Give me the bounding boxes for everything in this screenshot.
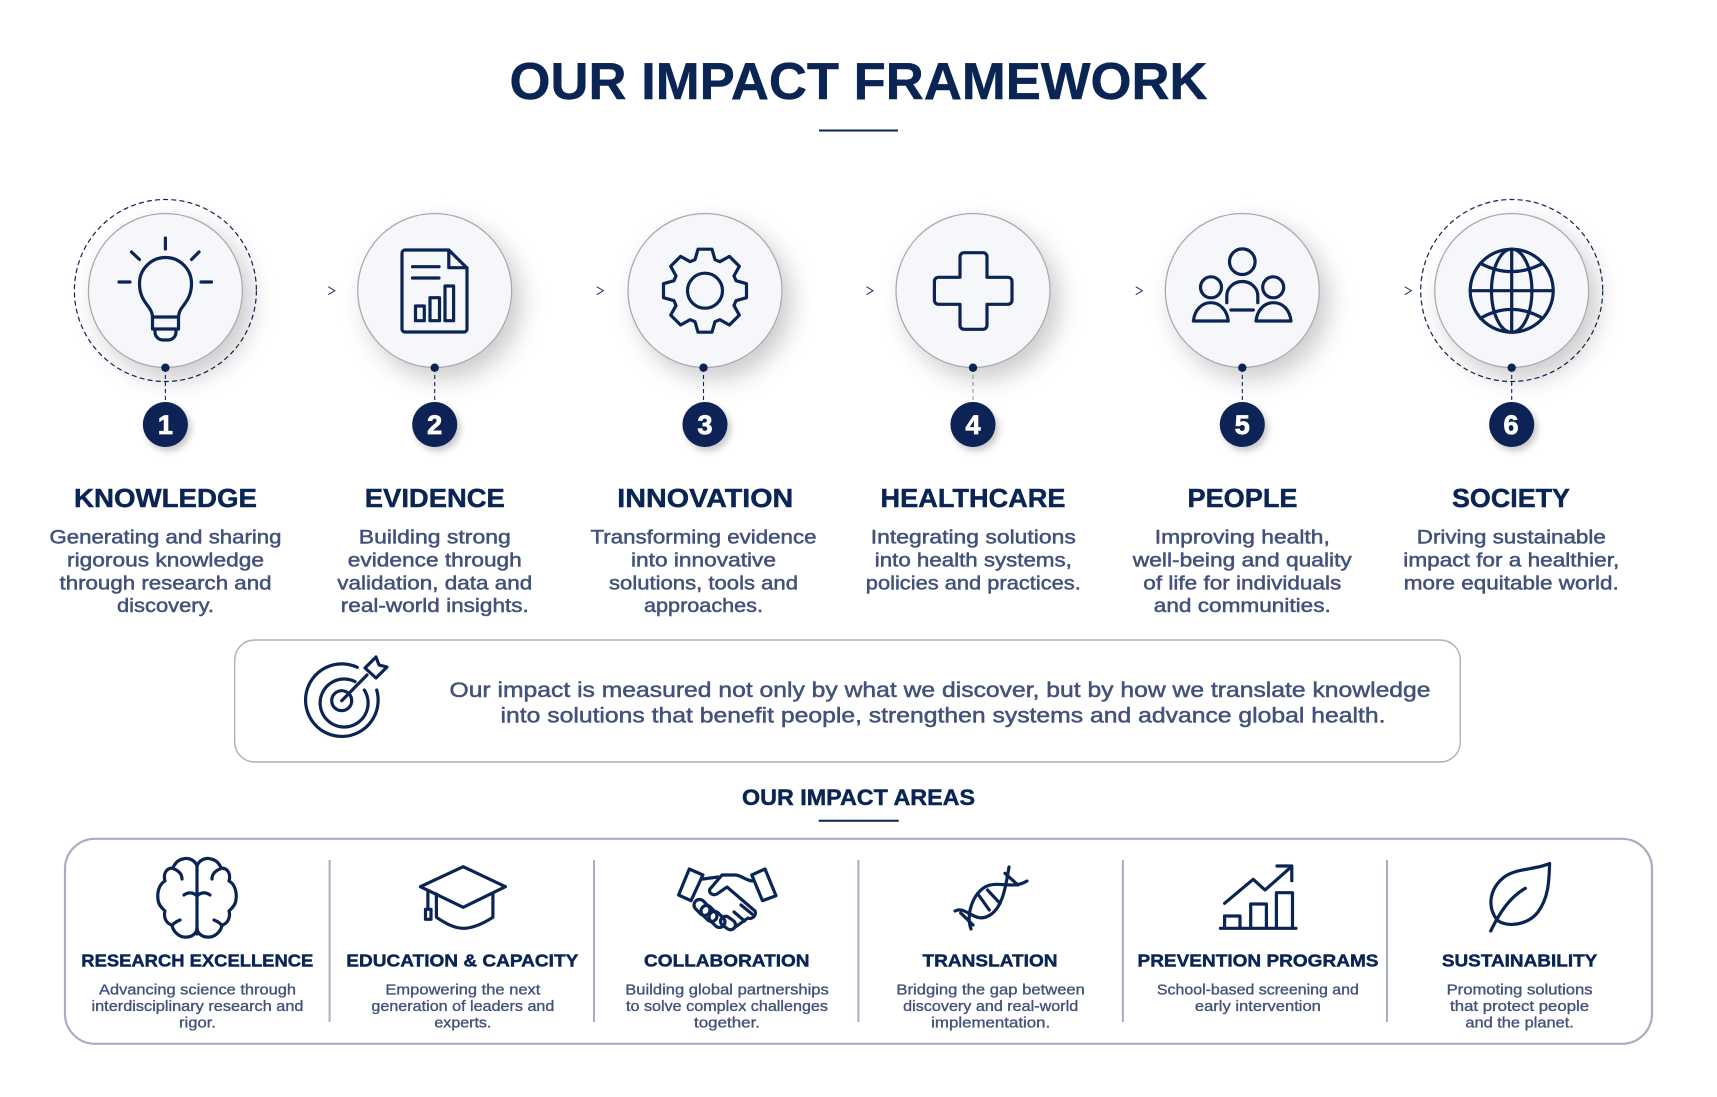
icon circle: report document — [358, 214, 512, 368]
description: people — [1132, 526, 1352, 617]
description: evidence: Building strong — [359, 526, 511, 548]
description: evidence — [337, 526, 532, 617]
description: discovery and real-world — [903, 998, 1078, 1015]
area: prevention programs — [1138, 866, 1378, 1015]
icon: dna helix — [955, 867, 1027, 929]
icon: target with arrow — [306, 657, 387, 736]
description: evidence: validation, data and — [337, 572, 532, 594]
description: Empowering the next — [385, 981, 541, 998]
description: people: Improving health, — [1155, 526, 1330, 548]
description: innovation: solutions, tools and — [609, 572, 798, 594]
description: evidence: evidence through — [348, 549, 522, 571]
description: healthcare — [866, 526, 1081, 594]
description: rigor. — [179, 1014, 216, 1031]
step 2: evidence — [337, 214, 532, 617]
description: knowledge: rigorous knowledge — [67, 549, 264, 571]
description: society: impact for a healthier, — [1403, 549, 1619, 571]
description: interdisciplinary research and — [92, 998, 304, 1015]
number badge 1 — [143, 402, 188, 447]
number badge 6: 6 — [1503, 410, 1519, 440]
description: society: more equitable world. — [1404, 572, 1619, 594]
icon: rising bar chart — [1220, 866, 1296, 928]
description: innovation — [590, 526, 816, 617]
description — [371, 981, 554, 1031]
number badge 4 — [950, 402, 996, 447]
number badge 4: 4 — [965, 410, 981, 440]
description: generation of leaders and — [371, 998, 554, 1015]
description: experts. — [434, 1014, 491, 1031]
description: early intervention — [1195, 998, 1321, 1015]
area: education and capacity — [346, 867, 579, 1031]
description: innovation: approaches. — [644, 595, 763, 617]
heading: our impact areas: OUR IMPACT AREAS — [742, 785, 975, 810]
icon circle: medical cross — [896, 214, 1050, 368]
description: healthcare: Integrating solutions — [871, 526, 1076, 548]
description — [625, 981, 829, 1031]
description: society — [1403, 526, 1619, 594]
number badge 6 — [1489, 402, 1534, 447]
step 1: knowledge — [50, 200, 282, 617]
description: people: of life for individuals — [1143, 572, 1342, 594]
panel: impact areas — [65, 839, 1652, 1044]
description: to solve complex challenges — [626, 998, 828, 1015]
icon circle: light bulb — [74, 200, 256, 382]
icon circle: globe — [1421, 200, 1603, 382]
heading: innovation: INNOVATION — [617, 483, 793, 513]
label: TRANSLATION — [922, 951, 1058, 971]
label: EDUCATION & CAPACITY — [346, 951, 579, 971]
arrow 4 — [1136, 287, 1142, 295]
icon: graduation cap — [420, 867, 505, 928]
number badge 3: 3 — [697, 410, 713, 440]
label: PREVENTION PROGRAMS — [1138, 951, 1378, 971]
step 6: society — [1403, 200, 1619, 594]
arrow 5 — [1405, 287, 1411, 295]
arrow 1 — [328, 287, 335, 295]
icon: handshake — [679, 869, 776, 932]
description: implementation. — [931, 1014, 1050, 1031]
description: evidence: real-world insights. — [341, 595, 529, 617]
callout text — [450, 678, 1430, 727]
number badge 2: 2 — [427, 410, 442, 440]
heading: healthcare: HEALTHCARE — [880, 483, 1066, 513]
step 3: innovation — [590, 214, 816, 617]
description: Advancing science through — [99, 981, 296, 998]
description: healthcare: into health systems, — [875, 549, 1072, 571]
description — [1157, 981, 1359, 1015]
area: translation — [896, 867, 1085, 1031]
icon circle: gear — [628, 214, 782, 368]
description: Promoting solutions — [1447, 981, 1593, 998]
description — [1447, 981, 1593, 1031]
callout text: Our impact is measured not only by what we discover, but by how we translate knowledge — [450, 678, 1430, 702]
area: collaboration — [625, 869, 829, 1031]
description: knowledge: Generating and sharing — [50, 526, 282, 548]
description: people: and communities. — [1154, 595, 1331, 617]
title: OUR IMPACT FRAMEWORK — [510, 53, 1208, 111]
area: sustainability — [1442, 864, 1598, 1031]
heading: evidence: EVIDENCE — [365, 483, 505, 513]
heading: society: SOCIETY — [1452, 483, 1570, 513]
description — [92, 981, 304, 1031]
callout text: into solutions that benefit people, strengthen systems and advance global health. — [500, 703, 1386, 727]
number badge 1: 1 — [158, 410, 173, 440]
heading: people: PEOPLE — [1188, 483, 1298, 513]
icon: leaf — [1491, 864, 1550, 931]
description: knowledge: discovery. — [117, 595, 214, 617]
label: COLLABORATION — [644, 951, 810, 971]
number badge 5 — [1220, 402, 1265, 447]
heading: knowledge: KNOWLEDGE — [74, 483, 257, 513]
description: knowledge — [50, 526, 282, 617]
description: innovation: into innovative — [631, 549, 776, 571]
description: people: well-being and quality — [1132, 549, 1352, 571]
description: together. — [694, 1014, 760, 1031]
number badge 2 — [412, 402, 457, 447]
description: School-based screening and — [1157, 981, 1359, 998]
icon circle: people group — [1165, 214, 1319, 368]
callout panel — [235, 640, 1460, 762]
arrow 2 — [597, 287, 603, 295]
label: RESEARCH EXCELLENCE — [81, 951, 313, 971]
description — [896, 981, 1085, 1031]
description: knowledge: through research and — [60, 572, 272, 594]
description: healthcare: policies and practices. — [866, 572, 1081, 594]
step 4: healthcare — [866, 214, 1081, 594]
description: society: Driving sustainable — [1417, 526, 1606, 548]
description: innovation: Transforming evidence — [590, 526, 816, 548]
description: Bridging the gap between — [896, 981, 1085, 998]
description: that protect people — [1450, 998, 1589, 1015]
step 5: people — [1132, 214, 1352, 617]
number badge 3 — [682, 402, 728, 447]
arrow 3 — [866, 287, 873, 295]
label: SUSTAINABILITY — [1442, 951, 1598, 971]
description: Building global partnerships — [625, 981, 829, 998]
icon: brain — [158, 858, 236, 937]
area: research excellence — [81, 858, 313, 1031]
description: and the planet. — [1465, 1014, 1574, 1031]
number badge 5: 5 — [1235, 410, 1250, 440]
